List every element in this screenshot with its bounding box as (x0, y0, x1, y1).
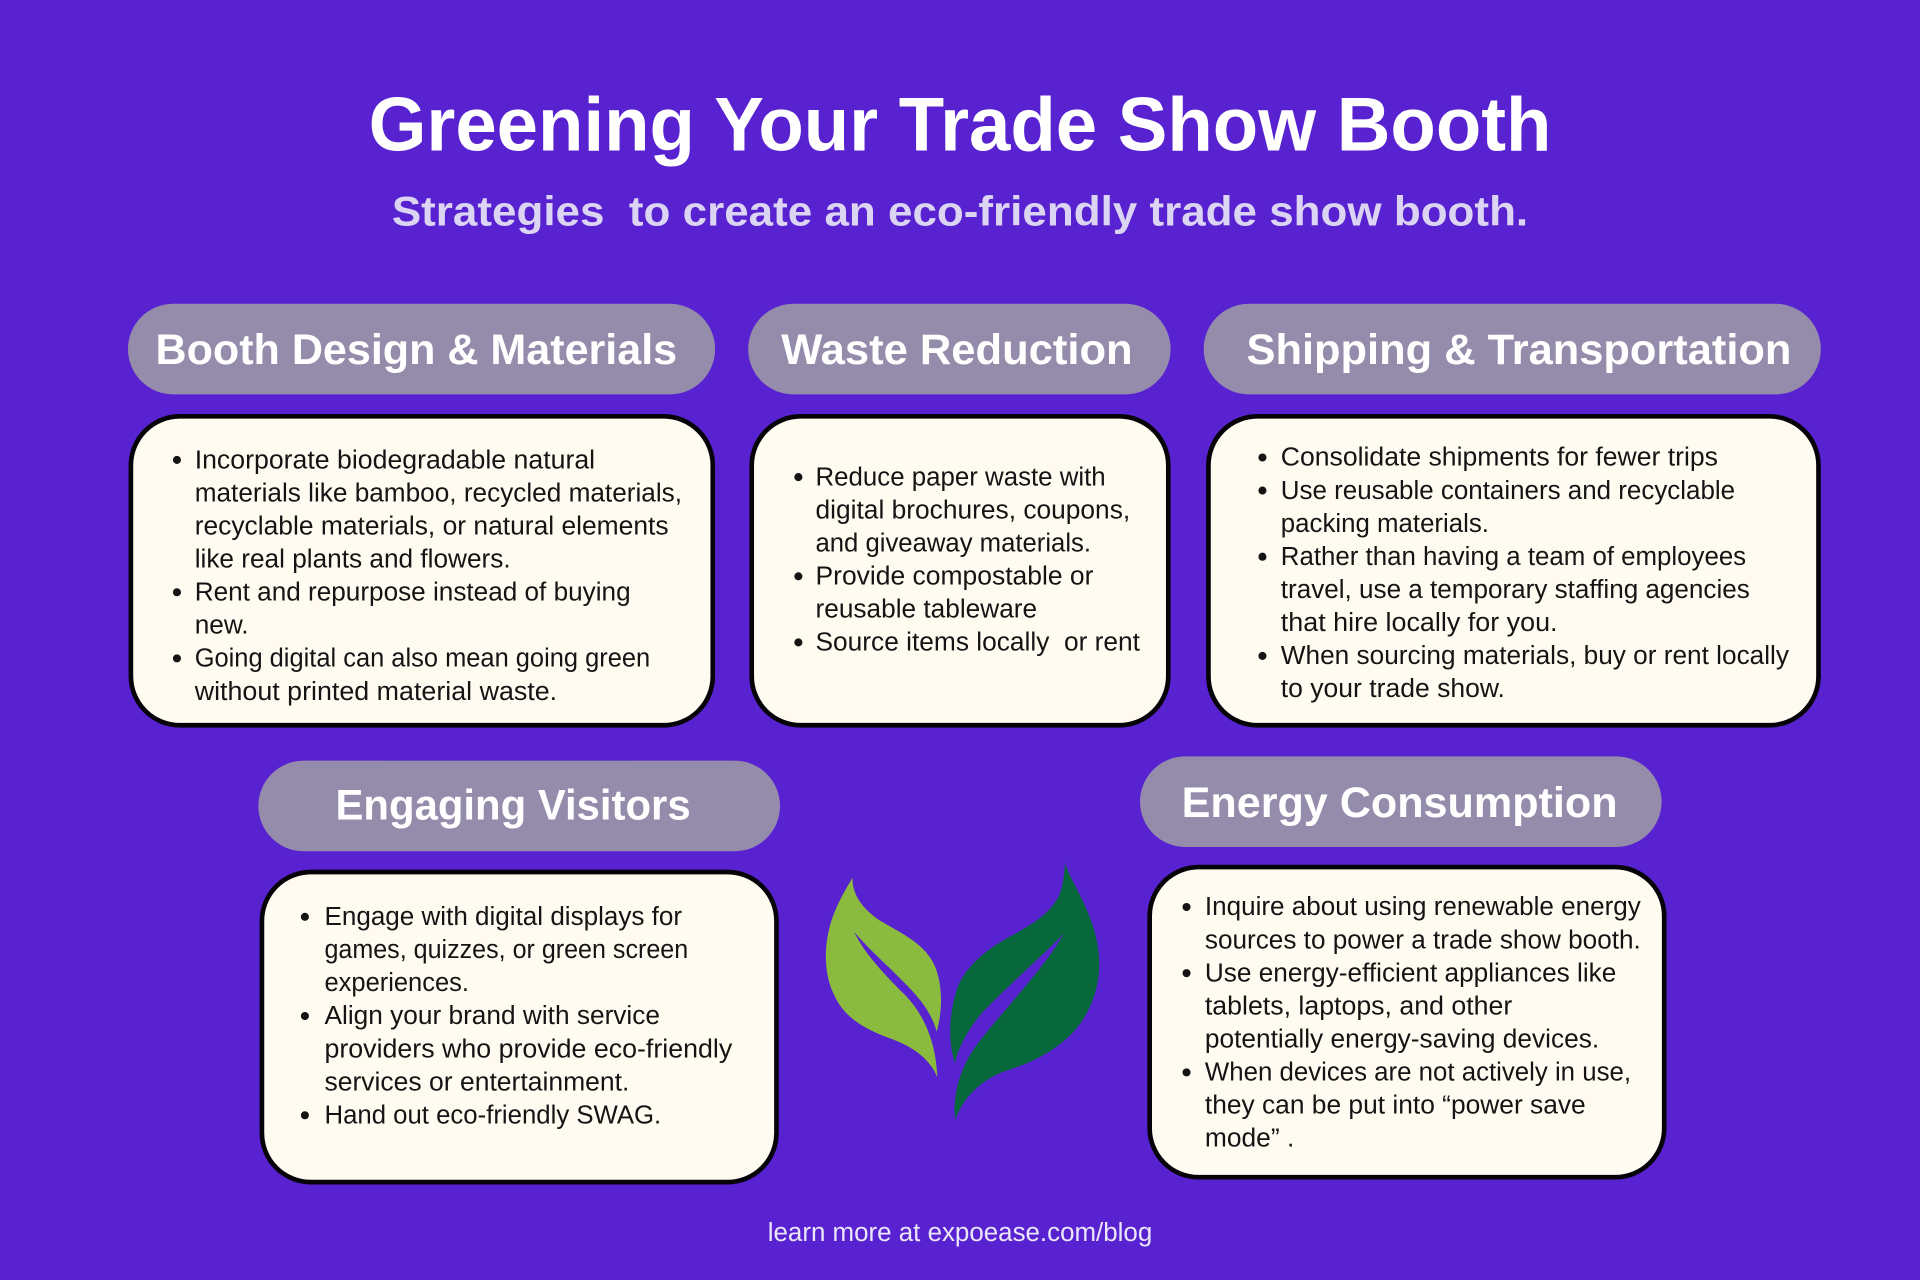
card: engaging visitors bullets: experiences. (324, 967, 469, 997)
card: shipping and transportation bullets (1208, 416, 1818, 725)
card: engaging visitors bullets: games, quizzes, or green screen (324, 934, 688, 964)
card: engaging visitors bullets: services or entertainment. (324, 1066, 629, 1096)
card: booth design and materials bullets: new. (195, 610, 249, 640)
card: engaging visitors bullets (262, 872, 776, 1182)
card: waste reduction bullets: digital brochures, coupons, (816, 494, 1130, 524)
card: energy consumption bullets: Inquire about using renewable energy (1205, 891, 1642, 921)
icon: two green leaves (826, 863, 1099, 1120)
card: shipping and transportation bullets: When sourcing materials, buy or rent locally (1281, 640, 1790, 670)
card: energy consumption bullets (1150, 867, 1664, 1177)
card: engaging visitors bullets: Engage with digital displays for (324, 901, 682, 931)
footer link text: learn more at expoease.com/blog (768, 1217, 1152, 1247)
card: engaging visitors bullets: Hand out eco-friendly SWAG. (324, 1099, 661, 1129)
card: booth design and materials bullets: materials like bamboo, recycled materials, (195, 477, 682, 507)
icon: light green leaf (826, 878, 941, 1077)
card: booth design and materials bullets: like real plants and flowers. (195, 543, 511, 573)
card: booth design and materials bullets: without printed material waste. (194, 676, 557, 706)
panel: shipping and transportation (1204, 304, 1821, 725)
heading pill: engaging visitors: Engaging Visitors (336, 781, 691, 829)
panel: energy consumption (1140, 756, 1664, 1177)
card: booth design and materials bullets: Incorporate biodegradable natural (195, 444, 595, 474)
card: energy consumption bullets: mode” . (1205, 1123, 1294, 1153)
card: engaging visitors bullets: Align your brand with service (324, 1000, 660, 1030)
heading pill: energy consumption: Energy Consumption (1182, 779, 1618, 827)
card: shipping and transportation bullets: travel, use a temporary staffing agencies (1281, 574, 1750, 604)
card: energy consumption bullets: sources to power a trade show booth. (1205, 924, 1641, 954)
card: energy consumption bullets: Use energy-efficient appliances like (1205, 957, 1616, 987)
card: booth design and materials bullets: Going digital can also mean going green (195, 643, 650, 673)
card: shipping and transportation bullets: packing materials. (1281, 508, 1489, 538)
card: shipping and transportation bullets: to your trade show. (1281, 673, 1505, 703)
card: shipping and transportation bullets: Rather than having a team of employees (1281, 541, 1746, 571)
card: waste reduction bullets: Provide compostable or (816, 561, 1094, 591)
card: energy consumption bullets: they can be put into “power save (1205, 1090, 1586, 1120)
card: waste reduction bullets: Source items locally or rent (816, 627, 1141, 657)
card: waste reduction bullets (752, 416, 1168, 725)
heading pill: shipping and transportation (1204, 304, 1821, 394)
title: Greening Your Trade Show Booth (369, 83, 1551, 168)
card: energy consumption bullets: potentially energy-saving devices. (1205, 1024, 1599, 1054)
card: booth design and materials bullets (131, 416, 713, 725)
heading pill: shipping and transportation: Shipping & Transportation (1247, 326, 1791, 374)
heading pill: waste reduction: Waste Reduction (781, 326, 1133, 374)
panel: engaging visitors (258, 761, 780, 1182)
subtitle: Strategies to create an eco-friendly trade show booth. (392, 187, 1528, 234)
card: booth design and materials bullets: recyclable materials, or natural elements (195, 510, 669, 540)
card: energy consumption bullets: When devices are not actively in use, (1205, 1057, 1631, 1087)
heading pill: energy consumption (1140, 756, 1662, 847)
panel: waste reduction (748, 304, 1171, 725)
card: shipping and transportation bullets: Use reusable containers and recyclable (1281, 475, 1735, 505)
card: booth design and materials bullets: Rent and repurpose instead of buying (195, 577, 631, 607)
card: waste reduction bullets: reusable tableware (816, 594, 1037, 624)
card: shipping and transportation bullets: Consolidate shipments for fewer trips (1281, 442, 1718, 472)
icon: dark green leaf (950, 863, 1099, 1120)
card: engaging visitors bullets: providers who provide eco-friendly (324, 1033, 733, 1063)
card: energy consumption bullets: tablets, laptops, and other (1205, 990, 1512, 1020)
heading pill: booth design and materials (128, 304, 715, 394)
heading pill: booth design and materials: Booth Design & Materials (156, 326, 677, 374)
heading pill: waste reduction (748, 304, 1171, 394)
card: waste reduction bullets: Reduce paper waste with (816, 461, 1106, 491)
panel: booth design and materials (128, 304, 715, 725)
heading pill: engaging visitors (258, 761, 780, 851)
card: shipping and transportation bullets: that hire locally for you. (1281, 607, 1558, 637)
card: waste reduction bullets: and giveaway materials. (816, 527, 1091, 557)
